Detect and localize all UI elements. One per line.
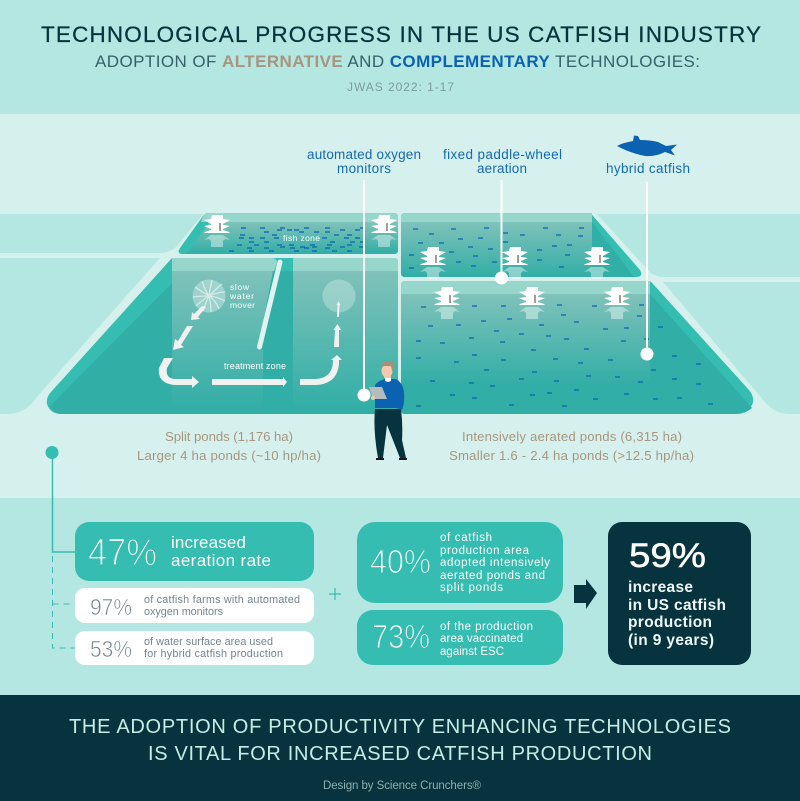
card: 53% hybrid catfish: of water surface area used (144, 636, 273, 648)
fish lower pond (416, 305, 714, 406)
caption: intensively aerated ponds: Intensively aerated ponds (6,315 ha) (462, 429, 682, 444)
conclusion: IS VITAL FOR INCREASED CATFISH PRODUCTION (148, 743, 652, 765)
card: 40% adoption: of catfish (440, 532, 492, 544)
callout: hybrid catfish: hybrid catfish (606, 161, 690, 176)
conclusion (69, 716, 731, 765)
pond: split pond treatment zone (47, 258, 398, 414)
card: 59% result: (in 9 years) (628, 632, 714, 649)
plus sign (329, 588, 341, 600)
callout: fixed paddle-wheel aeration: aeration (477, 161, 527, 176)
card: 97% monitors: oxygen monitors (144, 606, 224, 618)
card: 47% aeration (75, 522, 314, 581)
callout: automated oxygen monitors (307, 147, 421, 402)
card: 73% vaccinated (357, 610, 563, 665)
icon: slow water mover (192, 280, 226, 312)
arrow (574, 579, 597, 609)
results band (0, 498, 800, 695)
card: 59% result: in US catfish (628, 597, 726, 614)
footer band (0, 695, 800, 801)
caption: split ponds: Split ponds (1,176 ha) (165, 429, 293, 444)
pond: intensive lower (401, 281, 753, 414)
icon: hybrid catfish (617, 136, 677, 156)
paddle-wheel aerators (204, 215, 630, 319)
card: 59% result: 59% (629, 537, 706, 575)
connector lines (46, 446, 76, 648)
card: 59% result (608, 522, 751, 665)
scene background (0, 114, 800, 498)
conclusion: THE ADOPTION OF PRODUCTIVITY ENHANCING TECHNOLOGIES (69, 716, 731, 738)
card: 40% adoption: split ponds (440, 582, 503, 594)
card: 40% adoption (357, 522, 563, 603)
card: 53% hybrid catfish: for hybrid catfish production (144, 648, 283, 660)
label: slow water mover: mover (230, 300, 255, 310)
callout: fixed paddle-wheel aeration (443, 147, 562, 284)
card: 40% adoption: aerated ponds and (440, 570, 545, 582)
fish in fish zone (229, 228, 366, 251)
callout: automated oxygen monitors: automated oxygen (307, 147, 421, 162)
card: 53% hybrid catfish (75, 631, 314, 665)
figure: man with tablet (369, 361, 407, 460)
card: 97% monitors: 97% (90, 594, 132, 620)
card: 97% monitors (75, 588, 314, 623)
card: 47% aeration: aeration rate (171, 551, 271, 570)
label: slow water mover: water (229, 291, 254, 301)
card: 47% aeration: 47% (88, 532, 157, 574)
water flow arrows (159, 301, 342, 388)
card: 97% monitors: of catfish farms with automated (144, 594, 300, 606)
card: 47% aeration: increased (171, 533, 246, 552)
title: TECHNOLOGICAL PROGRESS IN THE US CATFISH INDUSTRY (41, 22, 761, 47)
card: 73% vaccinated: against ESC (440, 646, 504, 658)
pond: split pond fish zone (179, 213, 398, 254)
header band (0, 0, 800, 114)
card: 73% vaccinated: of the production (440, 621, 533, 633)
card: 53% hybrid catfish: 53% (90, 636, 132, 662)
card: 73% vaccinated: area vaccinated (440, 633, 523, 645)
callout: fixed paddle-wheel aeration: fixed paddle-wheel (443, 147, 562, 162)
card: 73% vaccinated: 73% (372, 618, 430, 655)
caption: split ponds: Larger 4 ha ponds (~10 hp/ha) (137, 448, 321, 463)
caption: intensively aerated ponds (449, 429, 694, 463)
credit: Design by Science Crunchers® (323, 780, 482, 792)
callout: automated oxygen monitors: monitors (337, 161, 391, 176)
icon: second water mover (322, 280, 356, 312)
card: 40% adoption: adopted intensively (440, 557, 550, 569)
levee divider (260, 262, 280, 347)
subtitle: ADOPTION OF ALTERNATIVE AND COMPLEMENTARY TECHNOLOGIES: (95, 52, 700, 71)
label: treatment zone: treatment zone (224, 361, 286, 371)
label: slow water mover (229, 282, 255, 310)
callout: hybrid catfish (606, 161, 690, 360)
caption: split ponds (137, 429, 321, 463)
pond: intensive upper (401, 213, 641, 277)
surrounding fields (0, 214, 800, 414)
card: 59% result: production (628, 614, 712, 631)
citation: JWAS 2022: 1-17 (347, 80, 454, 94)
label: slow water mover: slow (230, 282, 250, 292)
caption: intensively aerated ponds: Smaller 1.6 - 2.4 ha ponds (>12.5 hp/ha) (449, 448, 694, 463)
card: 40% adoption: 40% (370, 543, 431, 580)
fish upper pond (409, 228, 585, 268)
label: fish zone: fish zone (283, 233, 320, 243)
card: 40% adoption: production area (440, 545, 530, 557)
card: 59% result: increase (628, 579, 693, 596)
